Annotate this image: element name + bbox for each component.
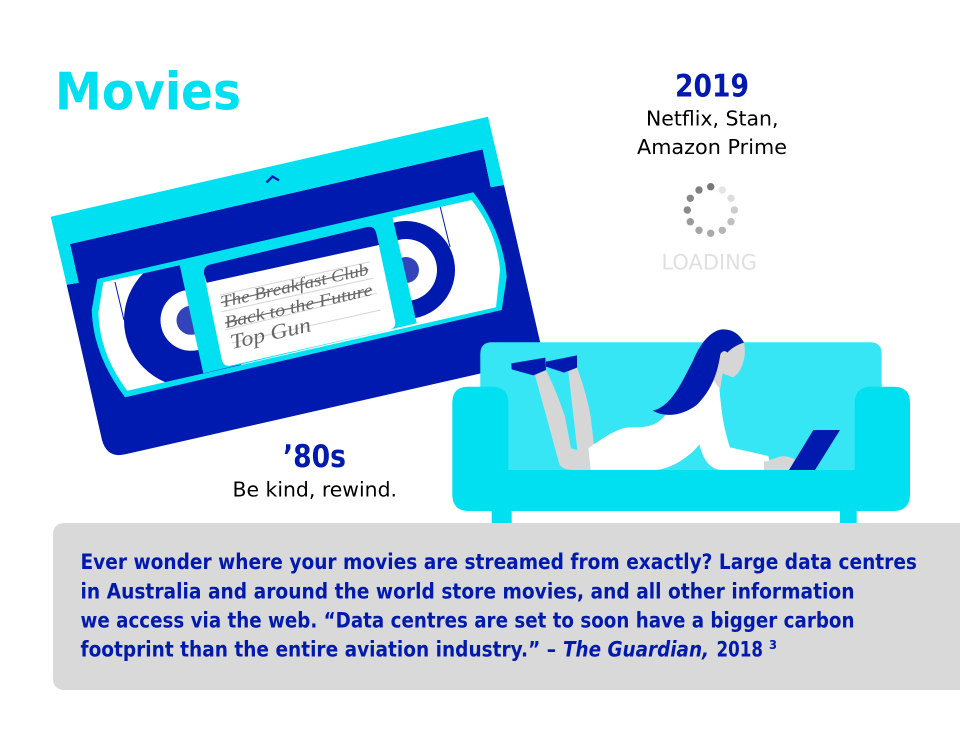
caption: 80s [232, 439, 397, 502]
illustration: woman lying on sofa with laptop [511, 329, 840, 470]
text block: footprint than the entire aviation industry.” – [80, 638, 556, 662]
panel: data centres note [53, 523, 960, 690]
illustration: sofa [452, 342, 910, 525]
hand [764, 456, 796, 470]
text block: we access via the web. “Data centres are set to soon have a bigger carbon [80, 608, 854, 634]
text block: The Guardian, [563, 638, 709, 662]
cassette window frame [92, 192, 507, 397]
laptop [789, 430, 840, 470]
icon: loading spinner [684, 183, 738, 237]
sofa base and arms [452, 387, 910, 511]
cassette top band [51, 117, 504, 285]
caption: 80s: Be kind, rewind. [232, 478, 397, 502]
caption: 2019: Netflix, Stan, [646, 107, 778, 131]
sofa legs [492, 505, 512, 525]
caption: 2019: 2019 [675, 69, 749, 105]
cassette body [67, 149, 544, 455]
legs [535, 367, 594, 470]
label [204, 227, 395, 366]
caption: 80s: ’80s [283, 439, 346, 475]
label text: Top Gun: Top Gun [228, 312, 313, 354]
label text: The Breakfast Club: The Breakfast Club [219, 260, 370, 311]
shoes [511, 358, 546, 375]
illustration: VHS cassette [51, 117, 544, 455]
cassette centre panel [179, 213, 417, 373]
caption: 2019: Amazon Prime [637, 135, 787, 159]
title: Movies [55, 62, 241, 122]
text block [80, 550, 917, 662]
label text: Back to the Future: Back to the Future [223, 280, 375, 332]
loading text: LOADING [662, 250, 757, 274]
sofa back [480, 342, 882, 470]
text block: in Australia and around the world store movies, and all other information [80, 580, 854, 604]
text block: 3 [769, 637, 777, 652]
tape reels [115, 206, 455, 387]
icon: chevron [266, 176, 279, 182]
text block: 2018 [716, 638, 763, 662]
hair [653, 329, 744, 415]
cassette window [98, 200, 500, 391]
neck and face [712, 342, 745, 390]
caption: 2019 [637, 69, 787, 159]
body [588, 380, 769, 470]
